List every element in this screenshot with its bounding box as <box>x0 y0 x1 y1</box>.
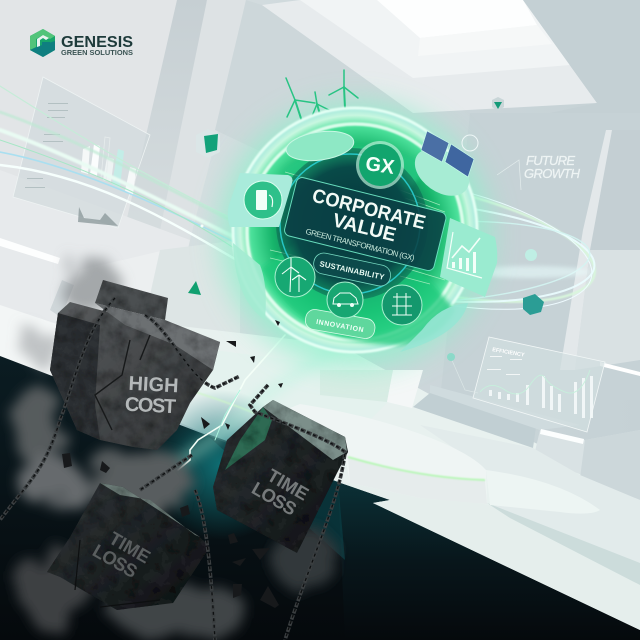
headline: CORPORATE <box>310 185 428 234</box>
bubble low <box>447 353 455 361</box>
inner bright ring <box>247 124 463 340</box>
neon line <box>348 457 485 480</box>
smoke clouds <box>10 255 337 640</box>
label: future growth <box>497 153 581 190</box>
wordmark: GENESIS <box>61 34 133 51</box>
label: COST <box>124 394 176 418</box>
label: HIGH <box>128 373 179 397</box>
efficiency glass panel <box>451 337 605 432</box>
left shell panel with solar grid icon <box>233 243 266 320</box>
logo: Genesis Green Solutions <box>30 29 133 57</box>
main disc <box>260 404 487 503</box>
back wall pieces <box>387 370 423 408</box>
orbit rings around sphere <box>255 152 605 334</box>
label: LOSS <box>248 477 300 520</box>
cube top left <box>196 129 220 158</box>
light streams from left <box>0 86 260 262</box>
subtitle: GREEN TRANSFORMATION (GX) <box>305 227 416 263</box>
label: TIME <box>106 527 154 568</box>
middle floor <box>60 320 640 640</box>
block: High Cost <box>50 280 220 450</box>
dashboard panel: left glass bar chart <box>13 77 150 228</box>
bubble right <box>525 249 537 261</box>
lower platform <box>338 482 640 630</box>
gem top <box>492 97 504 111</box>
sustainability pill <box>312 251 392 288</box>
icon: wind turbines <box>275 257 315 297</box>
pyramid left <box>188 281 201 295</box>
GX sphere <box>228 70 497 352</box>
block: Time Loss (lower) <box>47 483 210 610</box>
tagline: GREEN SOLUTIONS <box>61 48 133 57</box>
light beam and lightning <box>172 335 340 470</box>
rock body <box>47 483 210 610</box>
icon: hexagon G <box>30 29 55 57</box>
turbines on top <box>286 70 358 142</box>
label <box>89 523 154 584</box>
label <box>124 373 179 418</box>
rock body <box>50 280 220 450</box>
label: TIME <box>264 464 312 505</box>
block: Time Loss (right) <box>213 400 348 553</box>
skylight <box>262 0 597 113</box>
panel: EV charger <box>228 173 292 227</box>
floating cubes and crystals <box>188 97 544 361</box>
sustainability pill: SUSTAINABILITY <box>319 259 386 282</box>
icon: smart grid <box>382 285 422 325</box>
label: future growth: GROWTH <box>524 166 581 181</box>
chains <box>0 298 345 640</box>
right wall and column <box>440 113 640 400</box>
turbine pad <box>284 127 356 165</box>
glow behind sphere <box>219 101 491 369</box>
lower right shell <box>400 303 468 352</box>
rock body <box>213 400 348 553</box>
innovation pill: INNOVATION <box>315 319 364 334</box>
corporate value glass card <box>283 176 447 272</box>
dark void below the floor <box>0 356 640 640</box>
efficiency glass panel: EFFICIENCY <box>492 347 525 359</box>
innovation pill <box>304 308 376 340</box>
white stage podium <box>175 386 640 630</box>
gem right <box>523 294 544 315</box>
second disc <box>486 470 600 514</box>
dark core <box>276 148 428 300</box>
GX badge: GX <box>364 153 396 179</box>
label <box>248 461 312 521</box>
icon: electric car <box>327 282 363 318</box>
sphere body <box>233 108 477 352</box>
green circuit patches <box>262 146 455 345</box>
label: future growth: FUTURE <box>526 153 575 168</box>
label: LOSS <box>89 540 141 582</box>
solar pad and panels <box>406 131 478 206</box>
panel: growth chart <box>440 218 497 297</box>
left windows and floor <box>0 170 190 360</box>
rock debris <box>62 320 283 608</box>
GX badge <box>356 141 404 189</box>
corporate value glass card: VALUE <box>330 209 398 246</box>
